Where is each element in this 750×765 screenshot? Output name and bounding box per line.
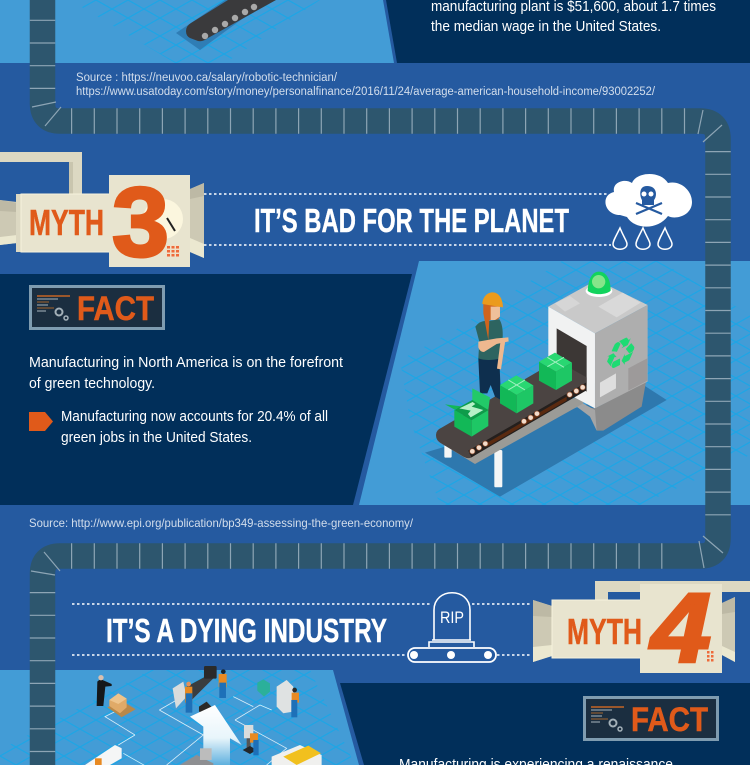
icon: RIP gravestone on conveyor: RIP	[440, 608, 464, 627]
wage text	[431, 0, 716, 35]
pipe	[595, 581, 750, 600]
number 4: 4	[649, 573, 711, 683]
number 3: 3	[112, 167, 169, 277]
machine and workers	[173, 666, 227, 713]
panel: myth 4 illustration	[0, 666, 359, 765]
white van	[85, 745, 122, 765]
heading myth 3: IT’S BAD FOR THE PLANET	[254, 202, 569, 239]
icon: toxic cloud	[605, 174, 692, 249]
source note myth 2: Source : https://neuvoo.ca/salary/robotic-technician/	[76, 72, 338, 84]
businessman	[97, 675, 112, 706]
dotted rules myth 4	[72, 604, 532, 655]
white machine and worker	[277, 680, 299, 717]
table legs	[444, 445, 502, 487]
source note myth 2: https://www.usatoday.com/story/money/personalfinance/2016/11/24/average-american-household-income/93002252/	[76, 86, 656, 98]
pallet of boxes	[107, 693, 136, 717]
source note myth 3: Source: http://www.epi.org/publication/bp349-assessing-the-green-economy/	[29, 516, 414, 530]
conveyor fragment	[176, 0, 276, 50]
fact text myth 3: Manufacturing in North America is on the forefront	[29, 354, 344, 371]
fact badge myth 4: FACT	[631, 701, 708, 739]
banner: myth 4	[533, 573, 750, 683]
top panel: robot technician fragment	[0, 0, 750, 63]
panel: myth 3 navy fact background	[0, 274, 412, 505]
fact text myth 3	[29, 354, 344, 392]
myth label: MYTH	[29, 202, 104, 243]
main body	[21, 194, 111, 252]
banner: myth 3	[0, 152, 204, 277]
big panel	[640, 584, 722, 673]
bullet text	[61, 408, 328, 446]
myth label: MYTH	[567, 611, 642, 652]
machine body	[548, 280, 648, 408]
dotted rules myth 3	[204, 194, 611, 245]
circuit paths	[105, 697, 287, 765]
right flap	[722, 597, 735, 662]
heading myth 4: IT’S A DYING INDUSTRY	[106, 612, 387, 649]
right flap	[190, 183, 204, 258]
growth arrow	[190, 705, 242, 765]
panel: myth 4 navy fact background	[340, 683, 750, 765]
yellow machine	[272, 745, 322, 765]
conveyor belt	[436, 361, 587, 458]
machine base	[577, 382, 646, 431]
worker	[475, 292, 509, 400]
drill machine and worker	[243, 725, 259, 755]
fact badge myth 4	[584, 698, 718, 740]
bullet arrow	[29, 412, 53, 431]
left flap	[533, 600, 552, 662]
teal machine	[257, 679, 270, 697]
fact text myth 3: of green technology.	[29, 375, 155, 392]
fact badge myth 3: FACT	[77, 290, 154, 328]
source note myth 2	[76, 72, 656, 98]
small orange machine	[199, 702, 212, 713]
big panel	[109, 175, 190, 267]
panel: myth 3 illustration	[359, 261, 750, 505]
bullet text: Manufacturing now accounts for 20.4% of all	[61, 408, 328, 425]
grey machine	[180, 748, 213, 765]
green boxes	[445, 353, 572, 437]
bullet text: green jobs in the United States.	[61, 429, 252, 446]
wage text: the median wage in the United States.	[431, 18, 661, 35]
recycling mark: ♻	[604, 324, 637, 384]
main body	[552, 600, 642, 658]
green beacon	[586, 272, 612, 297]
keypad	[707, 651, 714, 662]
keypad	[166, 245, 180, 257]
illustration: conveyor machine and worker	[425, 272, 667, 497]
pipe	[0, 152, 82, 196]
icon: RIP gravestone on conveyor	[408, 593, 496, 662]
fact badge myth 3	[30, 286, 164, 328]
left flap	[0, 200, 17, 245]
